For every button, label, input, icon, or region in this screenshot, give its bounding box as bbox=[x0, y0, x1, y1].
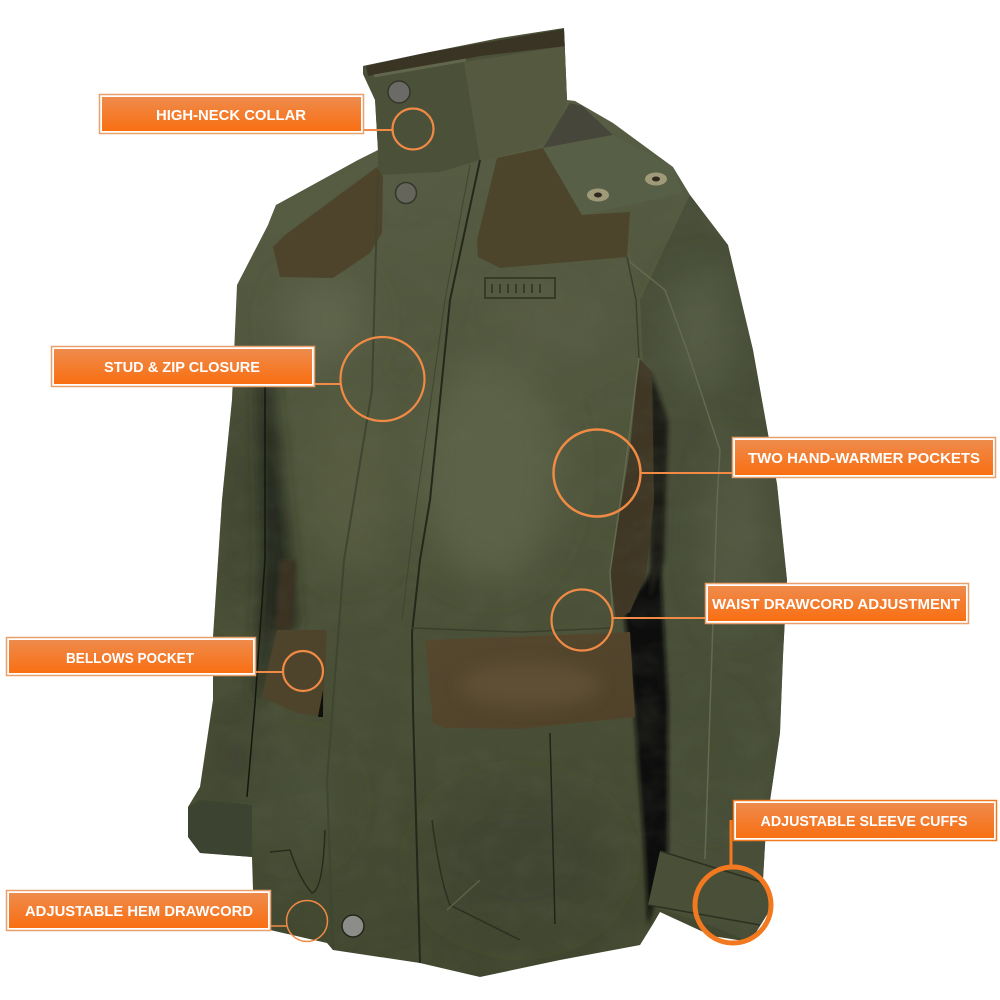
callout: adjustable hem drawcord: ADJUSTABLE HEM DRAWCORD bbox=[25, 903, 253, 920]
brown waist side panel bbox=[610, 358, 654, 620]
right cuff strap bbox=[648, 852, 670, 906]
left pocket flap bbox=[262, 630, 327, 717]
callout: waist drawcord adjustment bbox=[552, 584, 968, 650]
collar and hem studs bbox=[342, 81, 416, 937]
jacket illustration bbox=[180, 20, 800, 990]
callout: two hand-warmer pockets: TWO HAND-WARMER POCKETS bbox=[748, 450, 980, 467]
collar bbox=[363, 28, 567, 175]
hood roll bbox=[543, 103, 613, 148]
callout: waist drawcord adjustment: WAIST DRAWCORD ADJUSTMENT bbox=[712, 596, 960, 613]
left hem pocket bbox=[270, 830, 325, 893]
right pocket seams bbox=[550, 733, 555, 924]
callout: high-neck collar bbox=[100, 94, 434, 150]
logo bbox=[485, 278, 555, 298]
shoulder patch right bbox=[477, 148, 630, 268]
epaulette bbox=[268, 204, 278, 224]
waist seam bbox=[412, 628, 612, 632]
body light and dark areas bbox=[200, 286, 555, 786]
callout: bellows pocket: BELLOWS POCKET bbox=[66, 650, 194, 667]
left sleeve seam bbox=[247, 380, 265, 797]
callout: bellows pocket bbox=[6, 638, 323, 691]
callout: high-neck collar: HIGH-NECK COLLAR bbox=[156, 107, 306, 124]
placket bbox=[327, 175, 378, 950]
texture bbox=[632, 415, 666, 808]
callout: two hand-warmer pockets bbox=[554, 430, 996, 516]
callout: adjustable sleeve cuffs: ADJUSTABLE SLEEVE CUFFS bbox=[760, 813, 968, 830]
hood flap bbox=[568, 166, 674, 213]
callout: stud and zip closure: STUD & ZIP CLOSURE bbox=[104, 359, 260, 376]
callout: adjustable sleeve cuffs bbox=[695, 800, 996, 943]
hood eyelets bbox=[587, 172, 667, 202]
right sleeve bbox=[640, 195, 787, 942]
left shoulder patch bbox=[273, 167, 383, 278]
left cuff bbox=[188, 800, 252, 857]
sleeve-body black gap bbox=[624, 560, 668, 925]
callout: adjustable hem drawcord bbox=[6, 890, 328, 942]
callout: stud and zip closure bbox=[52, 337, 424, 421]
sleeve seams bbox=[627, 257, 639, 358]
left sleeve inner dark bbox=[255, 380, 296, 703]
right pocket flap bbox=[425, 632, 635, 729]
